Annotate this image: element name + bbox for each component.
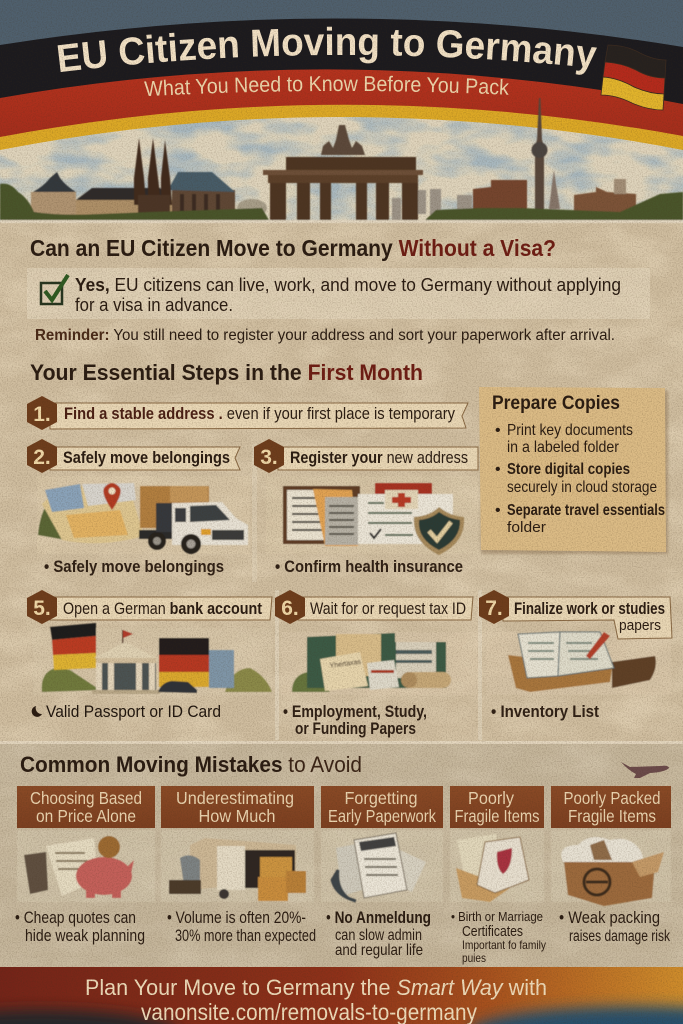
heading: moving mistakes: Common Moving Mistakes to Avoid [20, 752, 362, 777]
bullet list: Print key documents [507, 422, 633, 439]
step 6: or Funding Papers [295, 720, 416, 738]
bullet list: in a labeled folder [507, 439, 620, 456]
heading: Can an EU Citizen Move to Germany Without a Visa? [30, 235, 556, 261]
caption: • Birth or Marriage [451, 909, 543, 924]
mistake card 3 [321, 786, 443, 959]
reminder: Reminder: You still need to register your address and sort your paperwork after arrival. [35, 327, 615, 344]
bullet list [495, 422, 665, 536]
step 5 [27, 590, 272, 721]
badge [479, 590, 509, 624]
mistake card 4 [450, 786, 546, 965]
skyline illustration [0, 98, 683, 223]
subtitle: What You Need to Know Before You Pack [144, 76, 509, 96]
step 2 [27, 439, 250, 576]
quadriga [321, 125, 365, 155]
label: Register your new address [290, 449, 468, 467]
banner [50, 403, 468, 429]
icon: German flag [601, 45, 666, 110]
mistake card 3: Early Paperwork [328, 806, 436, 826]
badge: 3. [260, 446, 278, 469]
panel: prepare copies [479, 387, 668, 554]
illustration: stacked paperwork [321, 830, 443, 902]
caption: • No Anmeldung [326, 909, 431, 927]
title: EU Citizen Moving to Germany [58, 26, 597, 75]
icon: crescent bullet [32, 706, 42, 717]
black stripe [0, 18, 683, 104]
right buildings [473, 179, 636, 214]
step 7: papers [619, 617, 661, 634]
badge [27, 396, 57, 430]
step 7 [479, 590, 672, 721]
bullet list: Store digital copies [507, 461, 630, 478]
label: Find a stable address . even if your first place is temporary [64, 405, 456, 423]
illustration: bank and flags [33, 623, 272, 695]
cathedral [134, 138, 235, 215]
mistake card 3: Forgetting [344, 788, 418, 808]
mistake card 3: and regular life [335, 942, 423, 959]
label: Safely move belongings [63, 449, 230, 467]
mistake card 1 [15, 786, 155, 945]
footer banner [0, 967, 683, 1024]
mistake card 4: puies [462, 951, 486, 965]
answer text: Yes, EU citizens can live, work, and move to Germany without applying [75, 275, 621, 295]
trees behind gate [0, 184, 270, 222]
caption: • Employment, Study, [283, 703, 427, 721]
icon: airplane [621, 762, 669, 778]
illustration: truck and boxes [161, 830, 314, 902]
card header [161, 786, 314, 828]
banner [503, 597, 672, 639]
sky with clouds [0, 100, 683, 222]
badge: 1. [33, 403, 51, 426]
card header [17, 786, 155, 828]
mistake card 2 [161, 786, 316, 945]
banner [278, 447, 478, 470]
card header [321, 786, 443, 828]
sky top [0, 0, 683, 120]
Brandenburg Gate [263, 125, 423, 221]
card header [450, 786, 544, 828]
TV tower [532, 98, 560, 212]
red stripe [0, 60, 683, 137]
badge: 7. [485, 597, 503, 620]
mistake card 5: Fragile Items [568, 806, 656, 826]
badge: 2. [33, 446, 51, 469]
section: visa question [27, 235, 650, 344]
badge [275, 590, 305, 624]
answer panel: for a visa in advance. [75, 295, 233, 315]
mistake card 1: hide weak planning [25, 927, 145, 945]
trees right [423, 192, 683, 222]
badge [27, 439, 57, 473]
caption: • Volume is often 20%- [167, 909, 306, 927]
badge [27, 590, 57, 624]
mistake card 1: on Price Alone [36, 806, 136, 826]
far buildings [237, 189, 472, 220]
header banner [0, 0, 683, 222]
illustration: papers and folder: Yhertaxas [329, 659, 362, 670]
mistake card 5 [551, 786, 671, 945]
badge: 5. [33, 597, 51, 620]
caption: Valid Passport or ID Card [46, 703, 221, 721]
illustration: open book [486, 632, 671, 695]
mistake card 5: Poorly Packed [564, 788, 660, 808]
bullet list: • [495, 502, 501, 519]
mistake card 4: Fragile Items [454, 806, 540, 826]
bullet list: • [495, 422, 501, 439]
icon: checkbox [41, 275, 68, 304]
illustration: quote and piggy bank [17, 830, 155, 902]
illustration: certificates in box [450, 830, 544, 902]
left domed building [31, 172, 178, 217]
caption: • Safely move belongings [44, 558, 224, 576]
illustration: map and van [37, 476, 250, 554]
label: Open a German bank account [63, 600, 262, 618]
mistake card 4: Poorly [468, 788, 514, 808]
mistake card 1: Choosing Based [30, 788, 142, 808]
caption: • Inventory List [491, 703, 599, 721]
step 1 [27, 396, 468, 430]
caption: • Cheap quotes can [15, 909, 136, 927]
heading: essential steps: Your Essential Steps in the First Month [30, 360, 423, 385]
bullet list: securely in cloud storage [507, 479, 657, 496]
label: Wait for or request tax ID [310, 600, 466, 618]
footer text: Plan Your Move to Germany the Smart Way with [85, 975, 547, 1000]
mistake card 2: Underestimating [176, 788, 294, 808]
step 3 [254, 439, 478, 576]
panel heading: Prepare Copies [492, 393, 620, 414]
banner [50, 597, 272, 620]
mistake card 4: Certificates [462, 924, 523, 940]
badge [254, 439, 284, 473]
yellow stripe [0, 70, 683, 150]
mistake card 2: How Much [198, 806, 276, 826]
mistake card 4: Important fo family [462, 938, 546, 952]
mistake card 2: 30% more than expected [175, 927, 316, 945]
bullet list: folder [507, 520, 546, 536]
card header [551, 786, 671, 828]
illustration: documents and shield [266, 476, 478, 555]
illustration: damaged box [551, 830, 671, 906]
badge: 6. [281, 597, 299, 620]
answer panel [27, 268, 650, 319]
bullet list: • [495, 461, 501, 478]
caption: • Weak packing [559, 908, 660, 927]
caption: • Confirm health insurance [275, 558, 463, 576]
step 6 [275, 590, 478, 738]
mistake card 3: can slow admin [335, 927, 422, 944]
banner [298, 597, 473, 620]
illustration: papers and folder [281, 632, 478, 695]
banner [50, 447, 240, 470]
